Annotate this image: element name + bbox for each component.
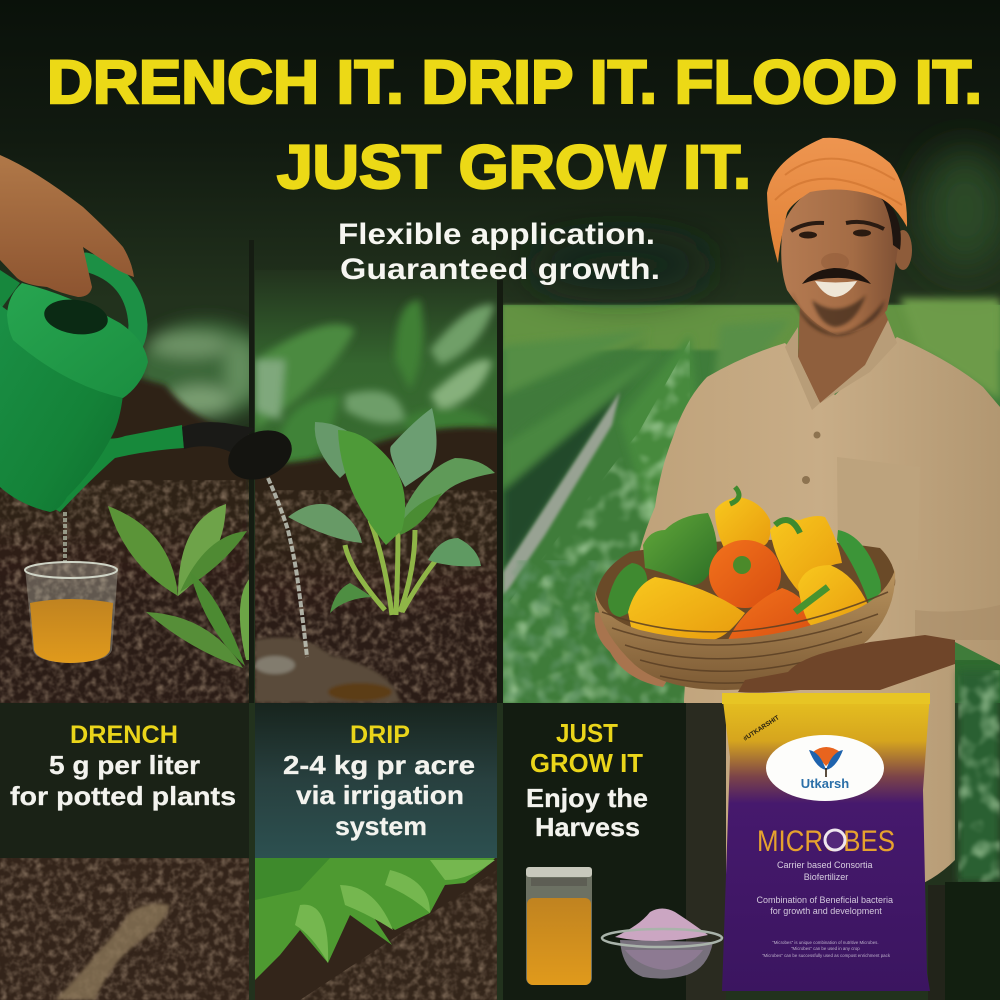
packet body [722,693,930,991]
measuring jar [526,867,592,985]
soil drench [0,370,250,710]
body: enjoy the harvest: Enjoy the [526,783,648,813]
description: Combination of Beneficial bacteria [756,895,893,905]
leaf back right [390,408,437,487]
ear [894,230,912,270]
body: enjoy the harvest [526,783,648,842]
soil texture bottom middle [300,870,497,1000]
leaf center [338,430,405,545]
seedling upper [108,504,247,596]
background foliage drench [140,312,249,424]
shirt pocket [837,457,920,560]
bottom scene: drench soil [0,858,250,1000]
heading: drip: DRIP [350,721,410,749]
leaf back left [314,422,347,478]
bottom scene: drip rows [255,858,497,1000]
dark leaf texture [503,560,657,703]
stem top [730,487,739,504]
bowl of powder [602,908,722,979]
body: drench [10,750,236,811]
left hand [595,612,680,687]
top seal [722,693,930,704]
green pepper [643,513,717,585]
stems [345,520,436,615]
subtitle: Biofertilizer [804,872,848,882]
distant trees [530,150,1000,290]
body: drip: system [335,811,427,841]
heading: drench: DRENCH [70,721,178,749]
moustache [802,268,871,284]
leaf left [288,504,362,543]
neck [798,300,888,403]
turban [767,138,907,263]
red pepper stem [733,556,751,574]
lid opening [42,296,110,338]
divider left [249,240,254,703]
small green peppers [608,563,647,617]
red orange pepper [709,540,781,608]
title: JUST GROW IT. [277,133,751,201]
trouser right [928,885,945,1000]
peppers [608,487,881,642]
handle back [0,270,20,310]
body: enjoy the harvest: Harvess [535,812,640,842]
crop rows [503,298,1000,575]
background fade drip [255,279,497,462]
stem right [775,520,800,533]
spout [40,425,184,512]
right foliage [945,670,1000,1000]
body: drip: 2-4 kg pr acre [283,750,475,780]
subtitle [338,218,660,286]
forearm and right hand [738,635,955,693]
can body [0,305,123,512]
large yellow pepper [628,577,745,640]
divider right [497,280,503,703]
shirt sleeve shadow [915,605,1000,640]
hand [0,155,134,297]
panel: just grow it [503,703,945,1000]
leaf left low [330,583,372,613]
title [47,48,982,201]
body: drench: 5 g per liter [49,750,200,780]
O ring [825,830,845,850]
trouser shadow [686,703,726,1000]
panel: field scene [503,298,1000,703]
heading: just grow it [530,718,643,778]
panel: drench scene [0,320,275,710]
logo wordmark: Utkarsh [801,776,849,791]
heading: just grow it: GROW IT [530,748,643,778]
water channel [503,392,620,595]
seedling lower [146,572,250,668]
leaf right low [428,538,481,566]
green chili [837,530,881,607]
heading: just grow it: JUST [556,718,618,748]
puddle [255,637,400,703]
leaf right upper [404,458,495,519]
logo mark [809,747,843,777]
subtitle: Flexible application. [338,218,655,251]
body: drip [283,750,475,841]
handle [86,262,138,358]
soil texture drip [255,490,497,703]
product packet [722,693,930,991]
soil drip [245,427,510,710]
big plant [288,408,495,615]
fine print: "Microbes" can be successfully used as compost enrichment pack [762,953,891,958]
drip stream [268,478,307,657]
turban folds [775,159,902,205]
crop row [255,858,495,980]
leaf texture [503,340,690,703]
lid [7,283,148,398]
nose [821,253,849,271]
yellow pepper lower right [798,565,868,630]
product name: MICROBES [757,825,895,858]
fine print: "Microbes" can be used in any crop [791,946,860,951]
rose head [221,421,299,489]
upper field [503,305,1000,350]
buttons [802,397,820,484]
water stream into cup [63,512,67,562]
basket with peppers [595,487,955,693]
basket weave [602,592,888,683]
basket front [595,570,895,690]
panel: drip scene [255,279,497,703]
basket back [595,540,895,650]
right foliage [955,660,1000,703]
soil texture drench [0,480,250,703]
eyes [799,230,871,238]
wet soil trail [55,904,170,1000]
brand hashtag: #UTKARSHIT [742,714,781,743]
face [781,182,900,335]
stem lower right [795,587,828,612]
yellow pepper right [770,516,842,593]
collar [785,320,897,410]
yellow pepper top [715,497,770,550]
shirt [640,337,1000,900]
beard [792,292,885,336]
smile [815,281,857,297]
crop leaves [255,858,495,963]
measuring cup [25,562,118,663]
hair [880,195,901,250]
title: DRENCH IT. DRIP IT. FLOOD IT. [47,48,982,116]
farmer [640,138,1000,900]
description: for growth and development [770,906,882,916]
eyebrows [791,222,884,231]
field background [503,305,1000,703]
body: drench: for potted plants [10,781,236,811]
text band: drench [0,703,249,858]
background foliage drip [255,300,495,470]
subtitle: Carrier based Consortia [777,860,873,870]
watering can [0,262,299,512]
logo oval [766,735,884,801]
soil texture bottom left [0,858,250,1000]
text band: drip [255,703,497,858]
orange pepper bottom [728,588,820,642]
nozzle [182,422,254,453]
subtitle: Guaranteed growth. [340,253,660,286]
fine print: "Microbes" is unique combination of nutritive Microbes. [772,940,879,945]
body: drip: via irrigation [296,780,464,810]
